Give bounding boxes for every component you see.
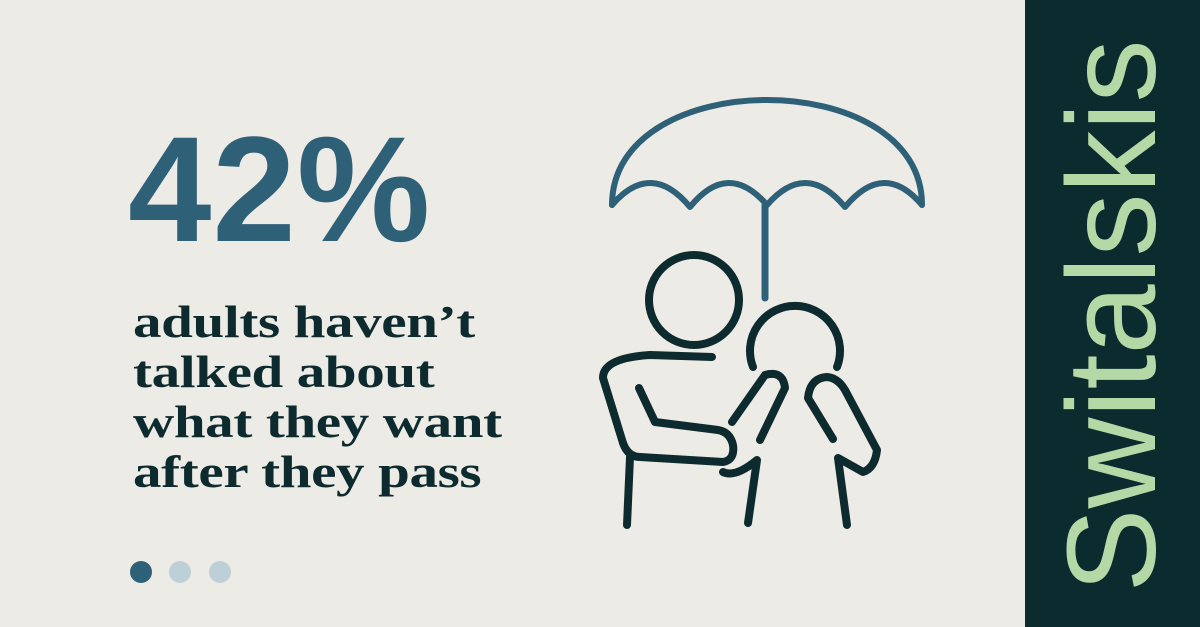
- icon: umbrella: [612, 100, 922, 298]
- icon: people: [603, 255, 877, 525]
- description text: what they want: [133, 396, 502, 447]
- description text: adults haven’t: [133, 296, 475, 347]
- brand band: [1025, 0, 1200, 627]
- description text: after they pass: [133, 446, 481, 497]
- description text: talked about: [133, 346, 434, 397]
- headline stat: 42%: [128, 105, 431, 273]
- description text: [133, 296, 502, 497]
- brand name: Switalskis: [1041, 39, 1182, 593]
- pagination dots: [130, 561, 231, 583]
